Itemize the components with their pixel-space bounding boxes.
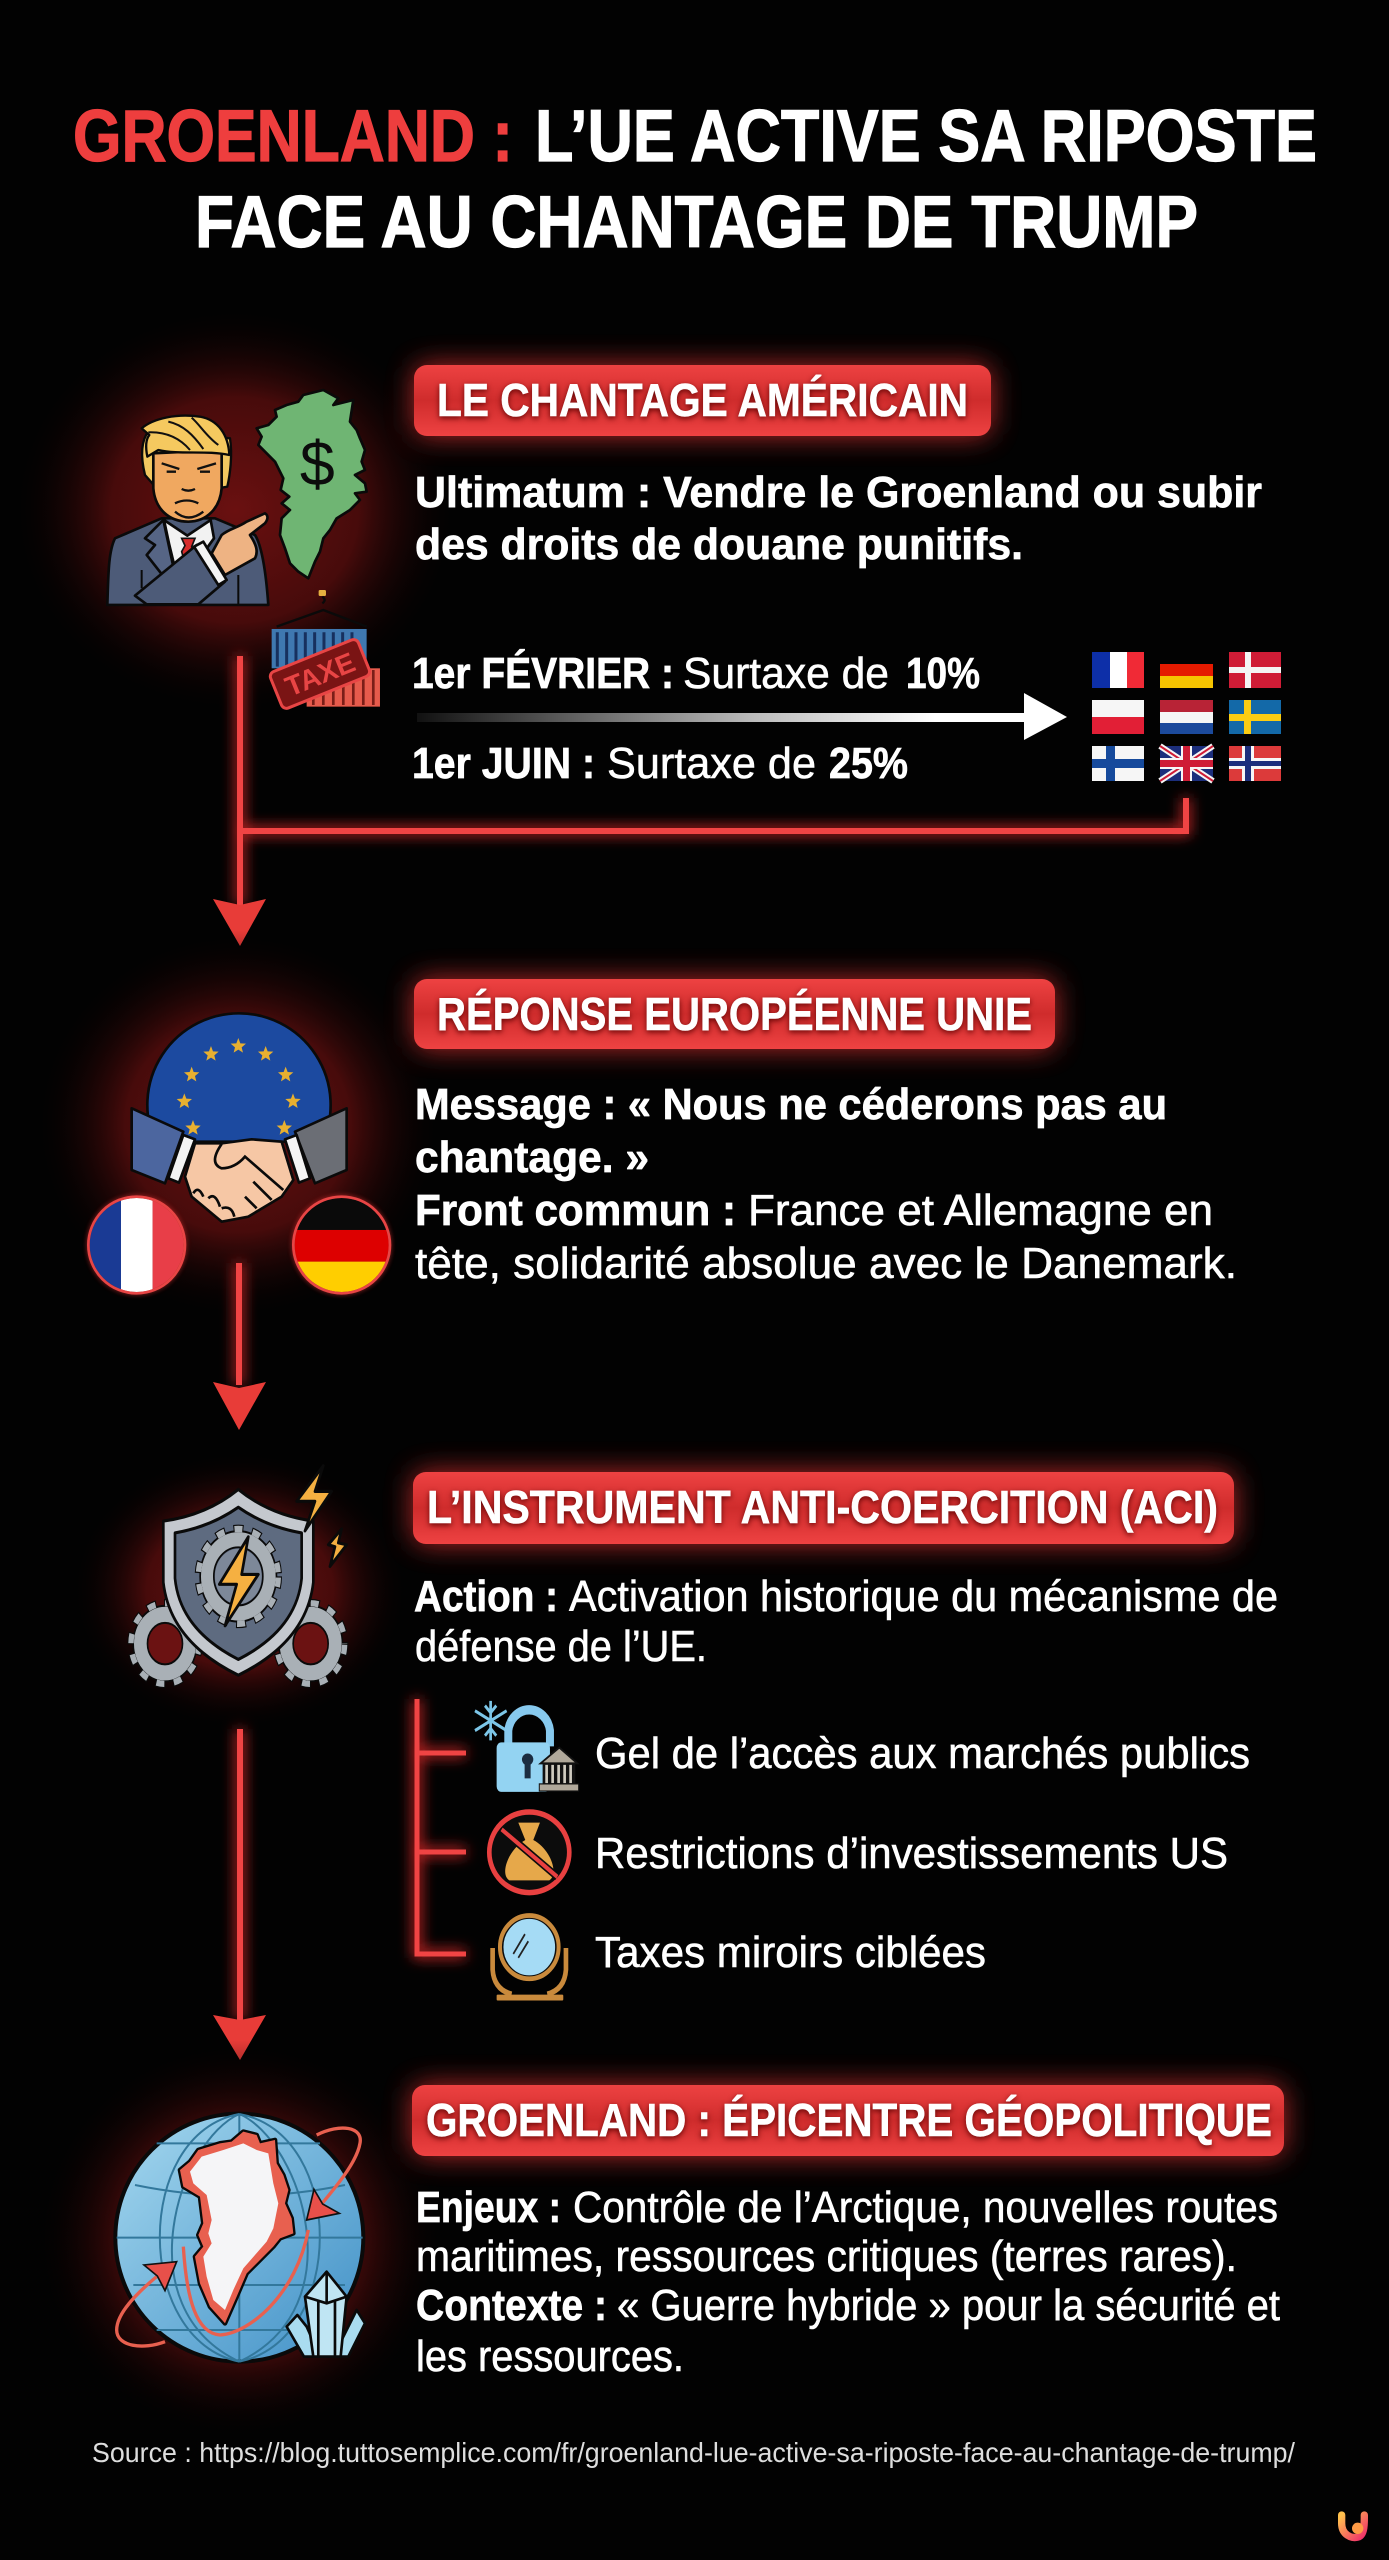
heading: groenland epicentre: GROENLAND : ÉPICENTRE GÉOPOLITIQUE: [426, 2094, 1272, 2146]
text: enjeux contexte: Enjeux :: [416, 2183, 561, 2232]
flag: france: [1092, 652, 1144, 688]
timeline: 1er fevrier: Surtaxe de: [683, 649, 889, 698]
text: enjeux contexte: maritimes, ressources critiques (terres rares).: [416, 2232, 1237, 2281]
icon: france disc: [87, 1195, 187, 1295]
heading: reponse europeenne unie: [414, 979, 1055, 1049]
timeline: 1er juin: [412, 739, 908, 788]
icon: no money bag: [489, 1812, 569, 1893]
panel: instrument anti-coercition: [70, 1450, 1278, 2060]
timeline: 1er fevrier: 1er FÉVRIER :: [412, 648, 674, 698]
flag: sweden: [1229, 700, 1281, 734]
flag: norway: [1229, 746, 1281, 781]
panel: reponse europeenne: [33, 930, 1237, 1430]
text: message: Message : « Nous ne céderons pas au: [415, 1080, 1167, 1129]
text: restrictions investissements: Restrictions d’investissements US: [595, 1829, 1228, 1878]
heading: instrument anti-coercition: [413, 1472, 1234, 1544]
text: message: chantage. »: [415, 1133, 649, 1182]
text: ultimatum: [415, 468, 1262, 569]
timeline: 1er fevrier: [412, 648, 980, 698]
flag: netherlands: [1160, 700, 1213, 734]
title: [73, 96, 1317, 263]
flag: germany: [1160, 664, 1213, 688]
heading: instrument anti-coercition: L’INSTRUMENT ANTI-COERCITION (ACI): [427, 1481, 1218, 1533]
text: enjeux contexte: Contrôle de l’Arctique, nouvelles routes: [573, 2183, 1278, 2232]
text: enjeux contexte: [416, 2183, 1280, 2381]
flag: united kingdom: [1160, 746, 1213, 781]
icon: globe with greenland: [115, 2114, 365, 2362]
flags grid: [1092, 652, 1281, 781]
text: enjeux contexte: Contexte :: [416, 2281, 607, 2330]
timeline: 1er juin: 25%: [829, 739, 908, 788]
text: message: Front commun :: [415, 1186, 736, 1235]
text: taxes miroirs: Taxes miroirs ciblées: [595, 1928, 986, 1977]
panel: groenland epicentre: [35, 2040, 1284, 2440]
flag: denmark: [1229, 652, 1281, 688]
timeline: 1er fevrier: 10%: [906, 649, 980, 698]
icon: trump pointing: [107, 390, 380, 710]
text: action: défense de l’UE.: [415, 1622, 707, 1671]
heading: groenland epicentre: [412, 2085, 1284, 2156]
icon: shield with gears: [131, 1466, 347, 1684]
heading: le chantage americain: LE CHANTAGE AMÉRICAIN: [437, 374, 968, 426]
icon: logo: [1342, 2515, 1364, 2537]
text: message: tête, solidarité absolue avec le Danemark.: [415, 1239, 1237, 1288]
icon: left gear: [131, 1603, 199, 1684]
heading: reponse europeenne unie: RÉPONSE EUROPÉENNE UNIE: [437, 988, 1032, 1040]
text: message: France et Allemagne en: [748, 1186, 1213, 1235]
icon: mirror: [493, 1916, 566, 2001]
icon: germany disc: [292, 1195, 392, 1295]
text: enjeux contexte: les ressources.: [416, 2332, 684, 2381]
bracket: red list connector: [417, 1699, 466, 1954]
text: action: [414, 1572, 1278, 1671]
flag: poland: [1092, 700, 1144, 734]
icon: right gear: [277, 1603, 345, 1684]
icon: eu handshake: [87, 1013, 392, 1295]
text: action: Action :: [414, 1572, 558, 1621]
arrow: long red down: [213, 1729, 266, 2060]
timeline: 1er juin: 1er JUIN :: [412, 739, 595, 788]
text: gel marches publics: Gel de l’accès aux marchés publics: [595, 1729, 1250, 1778]
arrow: white timeline: [417, 693, 1067, 740]
timeline: 1er juin: Surtaxe de: [607, 739, 816, 788]
icon: frozen lock and bank: [475, 1701, 579, 1792]
text: ultimatum: des droits de douane punitifs.: [415, 520, 1023, 569]
icon: trump pointing: $: [300, 430, 335, 500]
flag: finland: [1092, 746, 1144, 781]
icon: crystals: [287, 2272, 365, 2357]
icon: trump pointing: TAXE: [281, 646, 360, 702]
text: enjeux contexte: « Guerre hybride » pour la sécurité et: [617, 2281, 1280, 2330]
text: message: [415, 1080, 1237, 1288]
arrow: red connector to next section: [213, 656, 1186, 946]
title: GROENLAND :: [73, 96, 513, 177]
text: ultimatum: Ultimatum : Vendre le Groenland ou subir: [415, 468, 1262, 517]
source: Source : https://blog.tuttosemplice.com/fr/groenland-lue-active-sa-riposte-face-au-chantage-de-trump/: [92, 2437, 1295, 2468]
heading: le chantage americain: [414, 365, 991, 436]
panel: le chantage americain: [10, 305, 1281, 946]
text: action: Activation historique du mécanisme de: [569, 1572, 1278, 1621]
arrow: red down: [213, 1263, 266, 1430]
title: FACE AU CHANTAGE DE TRUMP: [195, 182, 1198, 263]
